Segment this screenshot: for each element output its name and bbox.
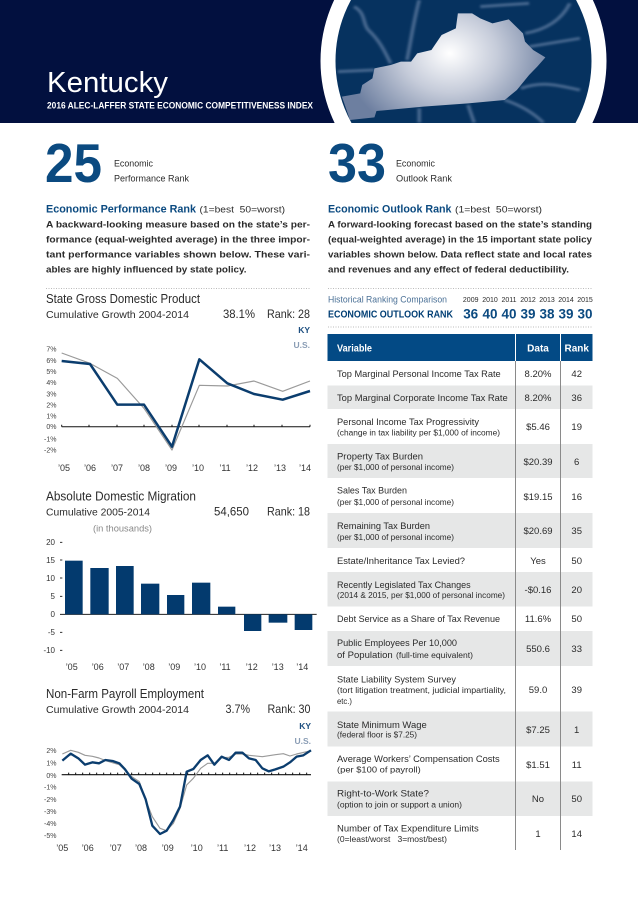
comparison label: Historical Ranking Comparison <box>328 294 447 306</box>
row: workers compensation: Average Workers’ Compensation Costs <box>337 754 500 765</box>
GDP value: 38.1% <box>223 307 255 321</box>
row: tax expenditure limits: 1 <box>535 829 541 840</box>
line chart: ’10 <box>191 843 203 853</box>
row: liability survey: etc.) <box>337 697 352 706</box>
historical ranks: 39 <box>558 306 574 322</box>
row: sales tax: 16 <box>571 492 582 503</box>
heading: (1=best 50=worst) <box>455 204 542 216</box>
bar chart: ’09 <box>168 662 180 672</box>
row: property tax: 6 <box>574 457 579 468</box>
bar chart: ’11 <box>219 662 231 672</box>
bar chart: ’10 <box>194 662 206 672</box>
row: personal income tax rate: 8.20% <box>525 369 552 380</box>
heading <box>46 204 285 216</box>
big number 33: 33 <box>328 132 386 194</box>
line chart: 4% <box>46 380 56 387</box>
row: property tax: Property Tax Burden <box>337 452 423 463</box>
line chart: 3% <box>46 392 56 398</box>
row: public employees: (full-time equivalent) <box>396 651 473 660</box>
line chart: ’12 <box>244 843 256 853</box>
line chart: ’12 <box>246 463 258 473</box>
row: corporate income tax rate: Top Marginal Corporate Income Tax Rate <box>337 393 508 404</box>
table header: Variable <box>337 344 372 354</box>
line chart: ’07 <box>111 463 123 473</box>
row: liability survey: State Liability System Survey <box>337 674 456 685</box>
line chart: ’10 <box>192 463 204 473</box>
row: right to work <box>337 789 582 810</box>
row: corporate income tax rate: 36 <box>571 393 582 404</box>
row: progressivity: Personal Income Tax Progressivity <box>337 417 479 428</box>
rank caption <box>396 158 452 184</box>
row: workers compensation <box>337 754 582 775</box>
row: right to work: Right-to-Work State? <box>337 789 429 800</box>
title: Kentucky <box>47 67 168 99</box>
bar chart: 10 <box>46 574 56 583</box>
row: workers compensation: $1.51 <box>526 760 550 771</box>
description text: and revenues and any effect of federal deductibility. <box>328 264 569 276</box>
bar chart: 15 <box>46 556 56 565</box>
row: sales tax: Sales Tax Burden <box>337 486 407 497</box>
chart subtitle: Cumulative Growth 2004-2014 <box>46 704 189 716</box>
row: sales tax: $19.15 <box>523 492 553 503</box>
heading: (1=best 50=worst) <box>200 204 285 216</box>
line chart: ’11 <box>219 463 231 473</box>
row: legislated changes <box>337 580 582 600</box>
line chart: 2% <box>46 402 56 410</box>
panel: domestic migration <box>43 488 317 672</box>
description text <box>46 220 310 276</box>
chart title: Non-Farm Payroll Employment <box>46 686 204 701</box>
outlook rank label: ECONOMIC OUTLOOK RANK <box>328 310 454 320</box>
line chart: 2% <box>46 748 56 755</box>
chart subtitle: Cumulative Growth 2004-2014 <box>46 309 189 321</box>
legend: U.S. <box>293 340 310 350</box>
years <box>463 297 593 304</box>
row: minimum wage <box>337 720 579 740</box>
line chart: 5% <box>46 369 56 376</box>
bar chart: ’14 <box>296 662 308 672</box>
line chart: ’09 <box>165 463 177 473</box>
historical ranks: 39 <box>520 306 536 322</box>
chart title: Absolute Domestic Migration <box>46 488 196 504</box>
row: legislated changes: -$0.16 <box>525 585 551 596</box>
description text: variables shown below. Data reflect state and local rates <box>328 250 592 260</box>
row: remaining tax: $20.69 <box>523 526 553 537</box>
bar chart: -5 <box>48 628 56 637</box>
row: progressivity: 19 <box>571 422 582 433</box>
line chart: -2% <box>44 448 56 454</box>
row shading <box>328 386 592 816</box>
row: debt service: 50 <box>571 614 582 625</box>
rank caption <box>114 158 189 184</box>
row: remaining tax: (per $1,000 of personal income) <box>337 533 454 542</box>
rank caption: Economic <box>114 158 153 170</box>
row: progressivity <box>337 417 582 438</box>
row: property tax: $20.39 <box>523 457 553 468</box>
employment value: 3.7% <box>226 702 250 716</box>
line chart: ’13 <box>274 463 286 473</box>
row: tax expenditure limits: (0=least/worst 3=most/best) <box>337 835 447 844</box>
table: state policy variables <box>328 334 592 850</box>
historical ranks: 36 <box>463 306 478 322</box>
table header <box>328 334 592 361</box>
row: estate tax: 50 <box>571 556 582 567</box>
description text: ables are highly influenced by state policy. <box>46 264 246 276</box>
line chart <box>44 748 311 853</box>
line chart: -5% <box>44 833 56 840</box>
line chart: ’14 <box>296 843 308 853</box>
row: tax expenditure limits: 14 <box>571 829 582 840</box>
legend <box>294 721 311 746</box>
row: remaining tax: 35 <box>571 526 582 537</box>
row: liability survey: 39 <box>571 685 582 696</box>
migration value: 54,650 <box>214 504 249 518</box>
row: liability survey: (tort litigation treatment, judicial impartiality, <box>337 686 506 695</box>
row: remaining tax <box>337 521 582 542</box>
line chart: -2% <box>44 797 56 804</box>
bar chart: 20 <box>46 538 56 547</box>
row: remaining tax: Remaining Tax Burden <box>337 521 430 532</box>
panel: payroll employment <box>44 686 311 853</box>
line chart: -4% <box>44 821 56 828</box>
GDP rank: Rank: 28 <box>267 307 310 321</box>
row: progressivity: (change in tax liability per $1,000 of income) <box>337 429 500 438</box>
bar chart: ’05 <box>66 662 78 672</box>
line chart: 6% <box>46 358 56 365</box>
historical ranks: 40 <box>502 306 517 322</box>
row: legislated changes: (2014 & 2015, per $1,000 of personal income) <box>337 591 505 600</box>
row: sales tax: (per $1,000 of personal income) <box>337 498 454 507</box>
description text <box>328 220 593 276</box>
heading: Economic Performance Rank <box>46 204 197 216</box>
row: right to work: No <box>532 794 544 805</box>
bar chart: ’06 <box>92 662 104 672</box>
description text: A backward-looking measure based on the state’s per- <box>46 220 310 230</box>
historical ranks: 38 <box>540 306 555 322</box>
row: minimum wage: 1 <box>574 725 579 736</box>
line chart: ’06 <box>82 843 94 853</box>
legend: U.S. <box>294 736 311 746</box>
row: debt service: Debt Service as a Share of Tax Revenue <box>337 614 500 625</box>
years: 2013 <box>539 297 555 304</box>
row: liability survey: 59.0 <box>529 685 547 696</box>
row: right to work: (option to join or support a union) <box>337 801 462 810</box>
subtitle: 2016 ALEC-LAFFER STATE ECONOMIC COMPETITIVENESS INDEX <box>47 100 314 112</box>
panel: state GDP <box>44 291 311 473</box>
row: personal income tax rate: 42 <box>571 369 582 380</box>
line chart: ’06 <box>84 463 96 473</box>
table header: Rank <box>564 344 589 354</box>
row: estate tax: Yes <box>530 556 546 567</box>
heading: Economic Outlook Rank <box>328 204 452 216</box>
row: workers compensation: 11 <box>572 760 582 771</box>
row: public employees: of Population <box>337 650 393 661</box>
years: 2012 <box>520 297 536 304</box>
line chart: ’05 <box>56 843 68 853</box>
historical ranks: 40 <box>482 306 498 322</box>
description text: A forward-looking forecast based on the state’s standing <box>328 220 592 230</box>
row: workers compensation: (per $100 of payroll) <box>337 766 421 775</box>
row: public employees: 550.6 <box>526 644 550 655</box>
row: sales tax <box>337 486 582 507</box>
line chart: ’05 <box>58 463 70 473</box>
description text: (equal-weighted average) in the 15 important state policy <box>328 234 593 246</box>
line chart: -1% <box>44 784 56 792</box>
line chart: -3% <box>44 809 56 816</box>
line chart: 0% <box>46 773 56 780</box>
row: progressivity: $5.46 <box>526 422 550 433</box>
row: public employees <box>337 638 582 661</box>
description text: tant performance variables shown below. These vari- <box>46 250 310 260</box>
migration rank: Rank: 18 <box>267 504 310 518</box>
unit note: (in thousands) <box>93 524 152 534</box>
chart title: State Gross Domestic Product <box>46 291 200 306</box>
bar chart: 0 <box>51 610 56 619</box>
row: personal income tax rate: Top Marginal Personal Income Tax Rate <box>337 369 501 380</box>
row: public employees: 33 <box>571 644 582 655</box>
big number 25: 25 <box>45 132 102 194</box>
historical ranks <box>463 306 593 322</box>
row: public employees: Public Employees Per 10,000 <box>337 638 457 649</box>
row: property tax: (per $1,000 of personal income) <box>337 463 454 472</box>
row: tax expenditure limits: Number of Tax Expenditure Limits <box>337 824 479 835</box>
line chart: -1% <box>44 436 56 444</box>
row: personal income tax rate <box>337 369 582 380</box>
panel: economic performance rank summary <box>45 132 310 276</box>
bar chart: ’08 <box>143 662 155 672</box>
line chart: ’13 <box>269 843 281 853</box>
years: 2014 <box>558 297 574 304</box>
row: debt service <box>337 614 582 625</box>
row: tax expenditure limits <box>337 824 582 844</box>
row: estate tax <box>337 556 582 567</box>
row: legislated changes: Recently Legislated Tax Changes <box>337 580 471 591</box>
years: 2010 <box>482 297 498 304</box>
bar chart: 5 <box>51 592 56 601</box>
legend: KY <box>298 325 310 335</box>
bar chart: ’13 <box>272 662 284 672</box>
row: minimum wage: $7.25 <box>526 725 550 736</box>
line chart <box>44 346 311 473</box>
row: debt service: 11.6% <box>525 614 552 625</box>
header banner <box>0 0 638 123</box>
years: 2015 <box>577 297 593 304</box>
line chart: 1% <box>46 760 56 768</box>
row: minimum wage: State Minimum Wage <box>337 720 427 731</box>
map circle with state silhouette <box>320 0 606 123</box>
row: legislated changes: 20 <box>571 585 582 596</box>
panel: economic outlook rank summary <box>328 132 593 276</box>
description text: formance (equal-weighted average) in the three impor- <box>46 234 310 246</box>
row: corporate income tax rate: 8.20% <box>525 393 552 404</box>
row: minimum wage: (federal floor is $7.25) <box>337 730 417 740</box>
line chart: ’08 <box>135 843 147 853</box>
legend: KY <box>299 721 311 731</box>
years: 2011 <box>501 297 517 304</box>
rank caption: Economic <box>396 158 435 170</box>
line chart: 7% <box>46 346 56 354</box>
chart subtitle: Cumulative 2005-2014 <box>46 506 150 518</box>
line chart: ’11 <box>217 843 228 853</box>
rank caption: Performance Rank <box>114 174 189 184</box>
employment rank: Rank: 30 <box>268 702 311 716</box>
line chart: 0% <box>46 424 56 431</box>
row: liability survey <box>337 674 582 706</box>
heading <box>328 204 542 216</box>
line chart: 1% <box>46 414 56 420</box>
legend <box>293 325 310 350</box>
line chart: ’09 <box>162 843 174 853</box>
table header: Data <box>527 344 549 354</box>
row: estate tax: Estate/Inheritance Tax Levied? <box>337 556 465 567</box>
row: property tax <box>337 452 579 472</box>
panel: historical ranking comparison <box>328 294 593 322</box>
bar chart: -10 <box>43 646 56 655</box>
line chart: ’07 <box>110 843 122 853</box>
rank caption: Outlook Rank <box>396 174 452 184</box>
bar chart: ’07 <box>117 662 129 672</box>
row: right to work: 50 <box>571 794 582 805</box>
line chart: ’08 <box>138 463 150 473</box>
bar chart: ’12 <box>246 662 258 672</box>
historical ranks: 30 <box>578 306 593 322</box>
years: 2009 <box>463 297 479 304</box>
bar chart <box>43 538 317 672</box>
line chart: ’14 <box>299 463 311 473</box>
